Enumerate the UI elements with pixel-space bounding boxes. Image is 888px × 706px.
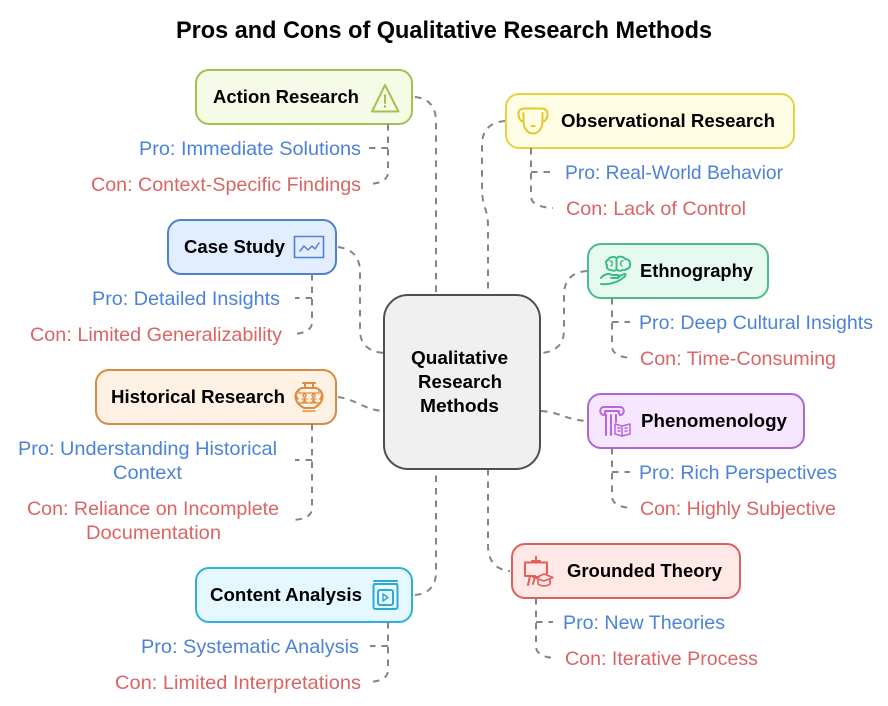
connector: action research to center [415, 97, 436, 295]
pro: grounded theory: Pro: New Theories [563, 612, 725, 634]
connector: historical research to center [338, 397, 384, 411]
panel: historical research [96, 370, 336, 424]
center node [384, 295, 540, 469]
pro: action research: Pro: Immediate Solutions [139, 138, 361, 160]
con: grounded theory: Con: Iterative Process [565, 648, 758, 670]
panel: content analysis: Content Analysis [210, 585, 362, 605]
con: case study: Con: Limited Generalizability [30, 324, 282, 346]
icon: column and book [600, 407, 630, 436]
pro: case study: Pro: Detailed Insights [92, 288, 280, 310]
pro: historical research: Pro: Understanding Historical [18, 438, 277, 460]
center node: Methods [420, 396, 499, 416]
icon: presentation board and cap [525, 557, 553, 586]
panel: observational research: Observational Research [561, 111, 775, 131]
pro: phenomenology: Pro: Rich Perspectives [639, 462, 837, 484]
con: ethnography: Con: Time-Consuming [640, 348, 836, 370]
branch lines: grounded theory [536, 598, 555, 658]
title: Pros and Cons of Qualitative Research Methods [176, 17, 712, 44]
pro: historical research: Context [113, 462, 183, 484]
icon: greek vase [295, 383, 323, 411]
panel: grounded theory: Grounded Theory [567, 561, 722, 581]
connector: observational research to center [482, 121, 505, 295]
con: content analysis: Con: Limited Interpretations [115, 672, 361, 694]
pro: historical research [18, 438, 277, 484]
icon: video book [374, 581, 398, 609]
branch lines: case study [293, 274, 312, 334]
branch lines: observational research [531, 148, 553, 208]
pro: ethnography: Pro: Deep Cultural Insights [639, 312, 873, 334]
branch lines: content analysis [369, 622, 388, 682]
panel: case study [168, 220, 336, 274]
branch lines: ethnography [612, 298, 632, 358]
panel: phenomenology: Phenomenology [641, 411, 787, 431]
con: historical research: Documentation [86, 522, 221, 544]
panel: action research: Action Research [213, 87, 359, 107]
panel: grounded theory [512, 544, 740, 598]
branch lines: phenomenology [612, 448, 632, 508]
con: observational research: Con: Lack of Control [566, 198, 746, 220]
panel: phenomenology [588, 394, 804, 448]
branch lines: action research [369, 124, 388, 184]
connector: phenomenology to center [541, 411, 587, 421]
con: historical research [27, 498, 279, 544]
center node: Qualitative [411, 348, 508, 368]
con: historical research: Con: Reliance on Incomplete [27, 498, 279, 520]
panel: case study: Case Study [184, 237, 285, 257]
pro: observational research: Pro: Real-World Behavior [565, 162, 783, 184]
connector: ethnography to center [541, 271, 587, 353]
panel: action research [196, 70, 412, 124]
con: action research: Con: Context-Specific Findings [91, 174, 361, 196]
pro: content analysis: Pro: Systematic Analysis [141, 636, 359, 658]
connector: content analysis to center [415, 469, 436, 595]
icon: brain in hand [601, 257, 630, 284]
panel: content analysis [196, 568, 412, 622]
panel: ethnography [588, 244, 768, 298]
center node: Research [418, 372, 502, 392]
con: phenomenology: Con: Highly Subjective [640, 498, 836, 520]
panel: observational research [506, 94, 794, 148]
icon: warning triangle [372, 85, 398, 112]
panel: ethnography: Ethnography [640, 261, 753, 281]
connector: case study to center [338, 247, 384, 353]
icon: line chart [294, 236, 324, 258]
panel: historical research: Historical Research [111, 387, 285, 407]
branch lines: historical research [293, 424, 312, 520]
icon: dog face [518, 108, 548, 134]
connector: grounded theory to center [488, 469, 510, 571]
